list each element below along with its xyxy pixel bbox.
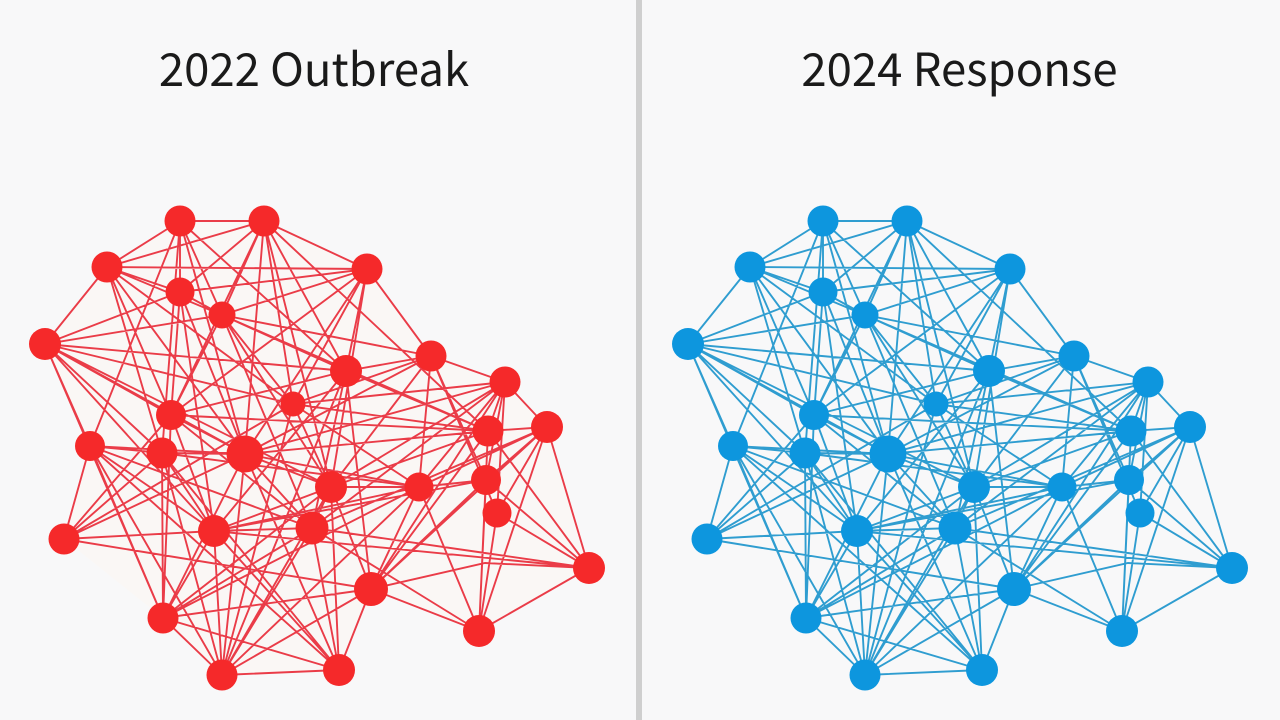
network chart: 2024 Response xyxy=(672,206,1248,690)
heading: 2024 Response: 2024 Response xyxy=(801,34,1118,100)
network edges: 2022 xyxy=(45,221,589,675)
network chart: 2022 Outbreak xyxy=(29,206,605,690)
panel: 2024 Response xyxy=(672,34,1248,690)
network nodes: 2024 xyxy=(672,206,1248,690)
panel: 2022 Outbreak xyxy=(29,34,605,690)
network edges: 2024 xyxy=(688,221,1232,675)
network nodes: 2022 xyxy=(29,206,605,690)
heading: 2022 Outbreak: 2022 Outbreak xyxy=(159,34,469,100)
